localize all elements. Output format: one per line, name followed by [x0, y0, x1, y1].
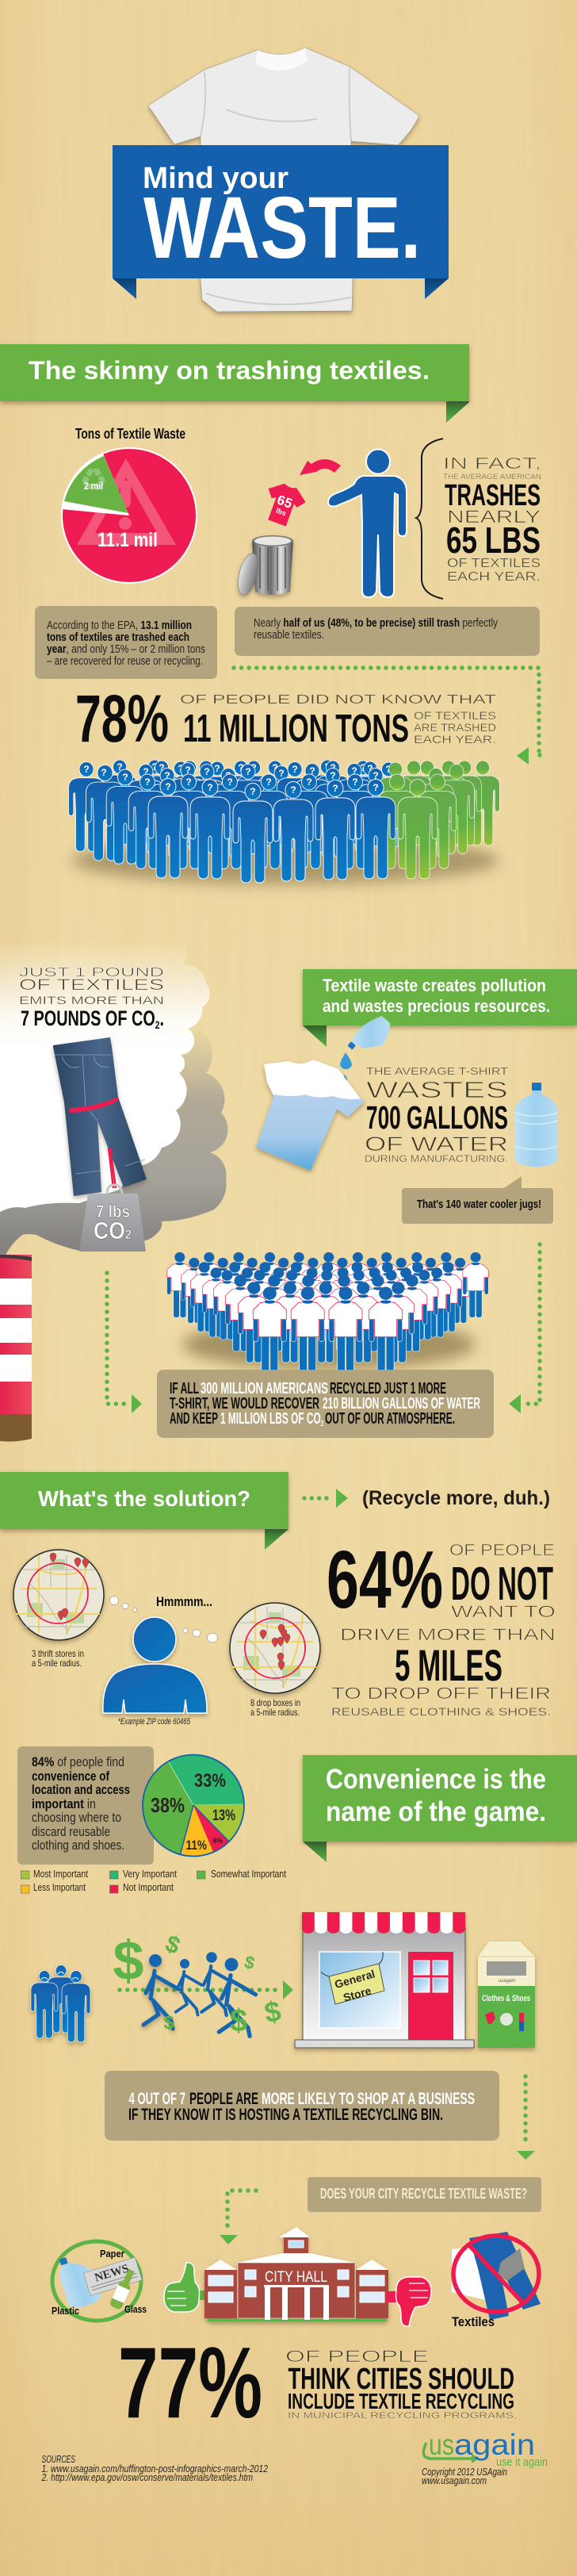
- callout: 300 million americans: OUT OF OUR ATMOSPHERE.: [325, 1410, 455, 1428]
- stat: trashes 65 lbs: [443, 455, 541, 584]
- stat: 64% do not want to drive: DRIVE MORE THAN: [340, 1626, 556, 1644]
- crowd: 78 percent blue, rest green: ?: [185, 765, 191, 776]
- section banner: what's the solution: [0, 1472, 288, 1550]
- crowd: 78 percent blue, rest green: ?: [367, 763, 373, 774]
- legend: Somewhat Important: [211, 1868, 286, 1880]
- icon: red t-shirt 65 lbs: [258, 479, 309, 530]
- map: drop boxes: [230, 1603, 320, 1693]
- pie chart: tons of textile waste: 2 mil: [84, 480, 103, 492]
- icon: red t-shirt 65 lbs: lbs: [275, 506, 287, 517]
- icon: red t-shirt 65 lbs: 65: [275, 493, 294, 512]
- illustration: jeans and weight: CO2: [94, 1217, 132, 1244]
- crowd: 78 percent blue, rest green: ?: [185, 776, 192, 788]
- callout: half of us: Nearly half of us (48%, to be precise) still trash perfectly: [254, 616, 498, 630]
- crowd: people in t-shirts: [167, 1252, 488, 1372]
- recycled materials circle: Plastic: [52, 2305, 79, 2317]
- crowd: 78 percent blue, rest green: ?: [204, 766, 210, 777]
- happy walking people with dollars: $: [162, 1930, 184, 1960]
- stat: 7 pounds of CO2: 2: [155, 1018, 160, 1031]
- weight: [79, 1194, 146, 1252]
- callout: 300 million americans: RECYCLED JUST 1 MORE: [330, 1380, 446, 1397]
- illustration: jeans and weight: 7 lbs: [96, 1202, 130, 1221]
- arrow: to recycle more: [304, 1489, 348, 1508]
- crowd: 78 percent blue, rest green: ?: [330, 770, 336, 781]
- title: WASTE.: WASTE.: [143, 179, 421, 277]
- stat: 78%: 11 MILLION TONS: [183, 707, 409, 750]
- icon: pouring jug and drops: [337, 1016, 390, 1091]
- crowd: 78 percent blue, rest green: ?: [351, 765, 357, 776]
- person throwing: [328, 449, 407, 597]
- crowd: 78 percent blue, rest green: ?: [122, 772, 128, 783]
- thought bubbles left: [109, 1596, 136, 1612]
- callout: 4 out of 7: 4 OUT OF 7: [128, 2090, 185, 2108]
- pie chart: importance of convenience: 6%: [213, 1837, 223, 1845]
- icon: white t-shirt: [148, 48, 419, 312]
- arrow: dotted to city hall: [220, 2191, 256, 2244]
- recycling bin: [478, 1942, 535, 2048]
- stat: trashes 65 lbs: 65 LBS: [446, 519, 541, 561]
- crowd: 78 percent blue, rest green: ?: [324, 761, 331, 772]
- glass bottle: [109, 2267, 137, 2310]
- callout: 4 out of 7: MORE LIKELY TO SHOP AT A BUSINESS: [262, 2090, 475, 2108]
- stat: 78%: OF TEXTILES: [414, 709, 496, 722]
- stat: 78%: [75, 681, 496, 756]
- crowd: 78 percent blue, rest green: ?: [309, 765, 315, 776]
- textiles banned sign: Textiles: [452, 2314, 495, 2329]
- callout: 84% of people: important in: [32, 1796, 96, 1811]
- crowd: 78 percent blue, rest green: ?: [225, 770, 231, 781]
- door: [408, 1952, 453, 2040]
- hero: t-shirt and title banner: [113, 48, 449, 312]
- stat: 700 gallons: OF WATER: [365, 1133, 508, 1156]
- plastic jug: [55, 2251, 102, 2310]
- ribbon fold left: [113, 278, 136, 299]
- copyright: www.usagain.com: [422, 2474, 487, 2486]
- dotted arrow: [120, 1988, 277, 1992]
- store body: [303, 1927, 465, 2040]
- crowd: 78 percent blue, rest green: ?: [352, 776, 358, 788]
- section banner: textile waste creates pollution: Textile waste creates pollution: [323, 976, 546, 995]
- callout: 300 million americans: T-SHIRT, WE WOULD RECOVER: [170, 1395, 319, 1413]
- crowd: 78 percent blue, rest green: ?: [385, 764, 392, 775]
- crowd: 78 percent blue, rest green: ?: [143, 766, 149, 777]
- happy walking people with dollars: $: [262, 1995, 283, 2029]
- callout: 4 out of 7: [105, 2071, 499, 2141]
- stat: 700 gallons: DURING MANUFACTURING.: [365, 1153, 508, 1164]
- callout: 300 million americans: 2: [321, 1420, 323, 1428]
- stat: trashes 65 lbs: THE AVERAGE AMERICAN: [443, 473, 541, 481]
- text: recycle more, duh: (Recycle more, duh.): [362, 1487, 550, 1509]
- crowd: 78 percent blue, rest green: ?: [278, 768, 285, 779]
- happy walking people with dollars: $: [163, 2012, 174, 2034]
- callout: 84% of people: location and access: [32, 1782, 130, 1797]
- arrow: dotted right to callout: [509, 1244, 540, 1413]
- stat: 700 gallons: THE AVERAGE T-SHIRT: [366, 1065, 508, 1077]
- callout: 4 out of 7: PEOPLE ARE: [189, 2090, 258, 2108]
- stat: 64% do not want to drive: TO DROP OFF THEIR: [331, 1685, 551, 1703]
- stat: trashes 65 lbs: IN FACT,: [443, 455, 541, 473]
- legend: Very Important: [123, 1868, 177, 1880]
- arrow: dotted down: [517, 2076, 535, 2160]
- crowd: 78 percent blue, rest green: ?: [83, 764, 90, 775]
- recycling bin: Clothes & Shoes: [482, 1994, 530, 2003]
- caption: thrift stores: a 5-mile radius.: [32, 1658, 82, 1669]
- stat: 64% do not want to drive: 5 MILES: [395, 1640, 502, 1690]
- pie chart: tons of textile waste: 11.1 mil: [97, 529, 158, 551]
- copyright: Copyright 2012 USAgain: [422, 2466, 507, 2478]
- title banner: [113, 145, 449, 278]
- recycle symbol: ♻: [79, 463, 108, 498]
- crowd: 78 percent blue, rest green: ?: [332, 783, 338, 794]
- callout: 84% of people: clothing and shoes.: [32, 1838, 124, 1853]
- crowd: 78 percent blue, rest green: ?: [373, 770, 379, 781]
- hanging sign: General: [333, 1967, 376, 1991]
- stat: 78%: EACH YEAR.: [414, 733, 496, 746]
- legend: [21, 1868, 286, 1893]
- title: Mind your: Mind your: [143, 162, 288, 195]
- left wing: [204, 2260, 237, 2318]
- crowd: 78 percent blue, rest green: ?: [373, 782, 379, 793]
- stat: 700 gallons: WASTES: [366, 1078, 508, 1103]
- callout: EPA: [35, 606, 217, 679]
- callout: 84% of people: [17, 1746, 154, 1865]
- crowd: 78 percent blue, rest green: ?: [101, 767, 107, 778]
- stat: 64% do not want to drive: REUSABLE CLOTHING & SHOES.: [331, 1705, 551, 1718]
- callout: half of us: reusable textiles.: [254, 628, 324, 642]
- sources: [41, 2453, 269, 2483]
- callout: 140 water cooler jugs: That's 140 water cooler jugs!: [417, 1198, 541, 1211]
- sources: 1. www.usagain.com/huffington-post-infographics-march-2012: [41, 2463, 269, 2474]
- stat: 7 pounds of CO2: EMITS MORE THAN: [19, 994, 164, 1006]
- icon: t-shirt filled with water: [256, 1060, 365, 1171]
- newspaper: NEWS: [94, 2262, 131, 2285]
- text: hmmmm: Hmmmm...: [156, 1594, 212, 1609]
- stat: trashes 65 lbs: EACH YEAR.: [447, 570, 541, 584]
- icon: trash can: [235, 535, 293, 597]
- window: [319, 1952, 400, 2028]
- pie chart: importance of convenience: 33%: [194, 1770, 226, 1792]
- crowd: 78 percent blue, rest green: ?: [159, 762, 165, 773]
- crowd: 78 percent blue, rest green: ?: [207, 782, 213, 793]
- crowd: 78 percent blue, rest green: ?: [227, 776, 233, 788]
- general store: [295, 1912, 474, 2048]
- pie chart: importance of convenience: [143, 1754, 244, 1856]
- crowd: 78 percent blue, rest green: ?: [164, 770, 170, 781]
- legend: Less Important: [33, 1881, 86, 1893]
- crowd: 78 percent blue, rest green: ?: [214, 763, 220, 774]
- recycled materials circle: Glass: [124, 2303, 147, 2315]
- crowd: 78 percent blue, rest green: ?: [117, 761, 123, 772]
- stat: trashes 65 lbs: NEARLY: [447, 507, 541, 527]
- callout: 84% of people: convenience of: [32, 1769, 109, 1784]
- jeans: [53, 1037, 147, 1196]
- stat: trashes 65 lbs: OF TEXTILES: [447, 557, 541, 570]
- copyright: [422, 2466, 507, 2486]
- recycling bin: usagain: [499, 1979, 515, 1984]
- callout: 140 water cooler jugs: [402, 1176, 553, 1224]
- pie chart: tons of textile waste: [62, 426, 197, 583]
- big dollar: $: [113, 1930, 143, 1991]
- pie chart: importance of convenience: 11%: [185, 1838, 207, 1853]
- crowd: 78 percent blue, rest green: ?: [144, 776, 151, 788]
- callout: EPA: tons of textiles are trashed each: [47, 631, 189, 644]
- callout: 84% of people: choosing where to: [32, 1810, 121, 1825]
- section banner: textile waste creates pollution: [303, 969, 577, 1047]
- callout: 84% of people: discard reusable: [32, 1824, 110, 1839]
- cord: [109, 1148, 116, 1188]
- smoke: [0, 1031, 228, 1259]
- crowd: 78 percent blue, rest green: ?: [203, 762, 209, 773]
- crowd: 78 percent blue, rest green: ?: [360, 762, 366, 773]
- arrow: dotted to 78%: [234, 668, 540, 765]
- happy walking people with dollars: $: [230, 2003, 247, 2038]
- stat: 64% do not want to drive: WANT TO: [451, 1603, 556, 1621]
- stat: 700 gallons: [365, 1065, 508, 1164]
- happy walking people with dollars: $: [243, 1952, 257, 1973]
- crowd: 78 percent blue, rest green: ?: [250, 762, 257, 773]
- illustration: jeans and weight: [53, 1037, 147, 1252]
- recycled materials circle: Paper: [100, 2248, 124, 2260]
- chart title: Tons of Textile Waste: [75, 426, 185, 442]
- caption: thrift stores: [32, 1648, 84, 1669]
- thumbs down: [387, 2277, 431, 2326]
- stat: 7 pounds of CO2: [19, 966, 164, 1031]
- sources: 2. http://www.epa.gov/osw/conserve/materials/textiles.htm: [41, 2471, 253, 2483]
- logo: usagain: [423, 2428, 548, 2469]
- stat: 77%: IN MUNICIPAL RECYCLING PROGRAMS.: [288, 2411, 517, 2421]
- hanging sign: Store: [342, 1984, 373, 2004]
- callout: 300 million americans: AND KEEP: [170, 1410, 218, 1428]
- crowd: 78 percent blue, rest green: ?: [330, 762, 336, 773]
- logo: usagain: use it again: [496, 2455, 548, 2469]
- caption: drop boxes: 8 drop boxes in: [250, 1697, 300, 1708]
- strap: [69, 1097, 118, 1113]
- logo: usagain: us: [429, 2428, 454, 2461]
- caption: thrift stores: 3 thrift stores in: [32, 1648, 84, 1659]
- crowd: 78 percent blue, rest green: ?: [250, 786, 256, 797]
- warning triangle watermark: [77, 458, 176, 545]
- crowd: 78 percent blue, rest green: ?: [178, 763, 184, 774]
- stat: 7 pounds of CO2: .: [159, 1006, 164, 1030]
- white cloud: [0, 921, 210, 1212]
- section banner: the skinny: The skinny on trashing textiles.: [29, 356, 430, 385]
- icon: water cooler jug: [514, 1083, 558, 1167]
- section banner: what's the solution: What's the solution?: [38, 1486, 250, 1511]
- stat: 64% do not want to drive: 64%: [327, 1534, 443, 1625]
- thought bubbles right: [183, 1628, 217, 1643]
- crowd: 78 percent blue, rest green: ?: [151, 761, 158, 772]
- section banner: convenience: name of the game.: [326, 1796, 546, 1827]
- sad people group: [31, 1965, 90, 2042]
- caption: drop boxes: [250, 1697, 300, 1718]
- crowd: 78 percent blue, rest green: ?: [272, 762, 278, 773]
- stat: 64% do not want to drive: OF PEOPLE: [449, 1542, 555, 1559]
- stat: 78%: ARE TRASHED: [414, 721, 496, 734]
- caption: example zip: *Example ZIP code 60465: [118, 1717, 191, 1727]
- map: thrift stores: [13, 1550, 104, 1640]
- stat: 78%: OF PEOPLE DID NOT KNOW THAT: [180, 693, 496, 707]
- brace: [416, 439, 443, 599]
- base: [295, 2040, 474, 2048]
- crowd: 78 percent blue, rest green: [68, 760, 499, 884]
- textiles banned sign: [452, 2232, 541, 2329]
- thumbs up: [164, 2263, 206, 2312]
- crowd: 78 percent blue, rest green: ?: [186, 762, 193, 773]
- callout: EPA: – are recovered for reuse or recycling.: [47, 654, 203, 668]
- crowd: 78 percent blue, rest green: ?: [292, 764, 298, 775]
- pie chart: importance of convenience: 13%: [212, 1807, 235, 1824]
- crowd: 78 percent blue, rest green: ?: [245, 766, 251, 777]
- crowd: 78 percent blue, rest green: ?: [165, 781, 171, 792]
- hanging sign: [321, 1952, 384, 2004]
- pie chart: importance of convenience: 38%: [151, 1793, 185, 1817]
- sources: SOURCES: [41, 2453, 75, 2465]
- crowd: 78 percent blue, rest green: ?: [238, 762, 244, 773]
- legend: Most Important: [33, 1868, 88, 1880]
- crowd: 78 percent blue, rest green: ?: [266, 776, 272, 788]
- callout: EPA: According to the EPA, 13.1 million: [47, 619, 192, 632]
- stat: 7 pounds of CO2: OF TEXTILES: [19, 977, 164, 994]
- callout: 300 million americans: 1 MILLION LBS OF CO: [220, 1410, 389, 1428]
- section banner: the skinny: [0, 344, 469, 423]
- section banner: convenience: [303, 1755, 577, 1862]
- callout: 300 million americans: 300 MILLION AMERICANS: [201, 1380, 328, 1397]
- stat: 7 pounds of CO2: JUST 1 POUND: [19, 966, 164, 979]
- callout: 84% of people: 84% of people find: [32, 1754, 124, 1769]
- caption: drop boxes: a 5-mile radius.: [250, 1707, 300, 1718]
- crowd: 78 percent blue, rest green: ?: [306, 776, 312, 788]
- chimney: [0, 1255, 32, 1442]
- illustration: smokestack and smoke: [0, 921, 228, 1442]
- callout: EPA: year, and only 15% – or 2 million tons: [47, 642, 205, 656]
- awning: [302, 1912, 465, 1934]
- crowd: 78 percent blue, rest green: ?: [290, 784, 296, 795]
- callout: 300 million americans: [157, 1370, 494, 1438]
- arrow: toss: [300, 459, 341, 475]
- ribbon fold right: [425, 278, 449, 299]
- arrow: dotted left to callout: [107, 1273, 142, 1413]
- callout: half of us: [235, 607, 540, 656]
- callout: does your city recycle: [308, 2177, 541, 2212]
- center block: [237, 2253, 355, 2320]
- legend: Not Important: [123, 1881, 174, 1893]
- city hall: [204, 2227, 388, 2321]
- stat: 77%: [118, 2326, 517, 2439]
- callout: 300 million americans: IF ALL: [170, 1380, 199, 1397]
- stat: 77%: 77%: [118, 2326, 262, 2439]
- logo: usagain: again: [454, 2428, 535, 2461]
- right wing: [356, 2260, 388, 2318]
- section banner: convenience: Convenience is the: [326, 1764, 546, 1795]
- stat: 64% do not want to drive: [327, 1534, 556, 1718]
- stat: 7 pounds of CO2: 7 POUNDS OF CO: [21, 1006, 204, 1030]
- stat: 77%: OF PEOPLE: [285, 2348, 429, 2366]
- stat: 78%: 78%: [75, 681, 169, 756]
- person thinking: [103, 1617, 207, 1713]
- center block: CITY HALL: [265, 2269, 327, 2286]
- recycled materials circle: [52, 2241, 147, 2321]
- cupola: [279, 2227, 310, 2255]
- happy walking people with dollars: [113, 1930, 293, 2038]
